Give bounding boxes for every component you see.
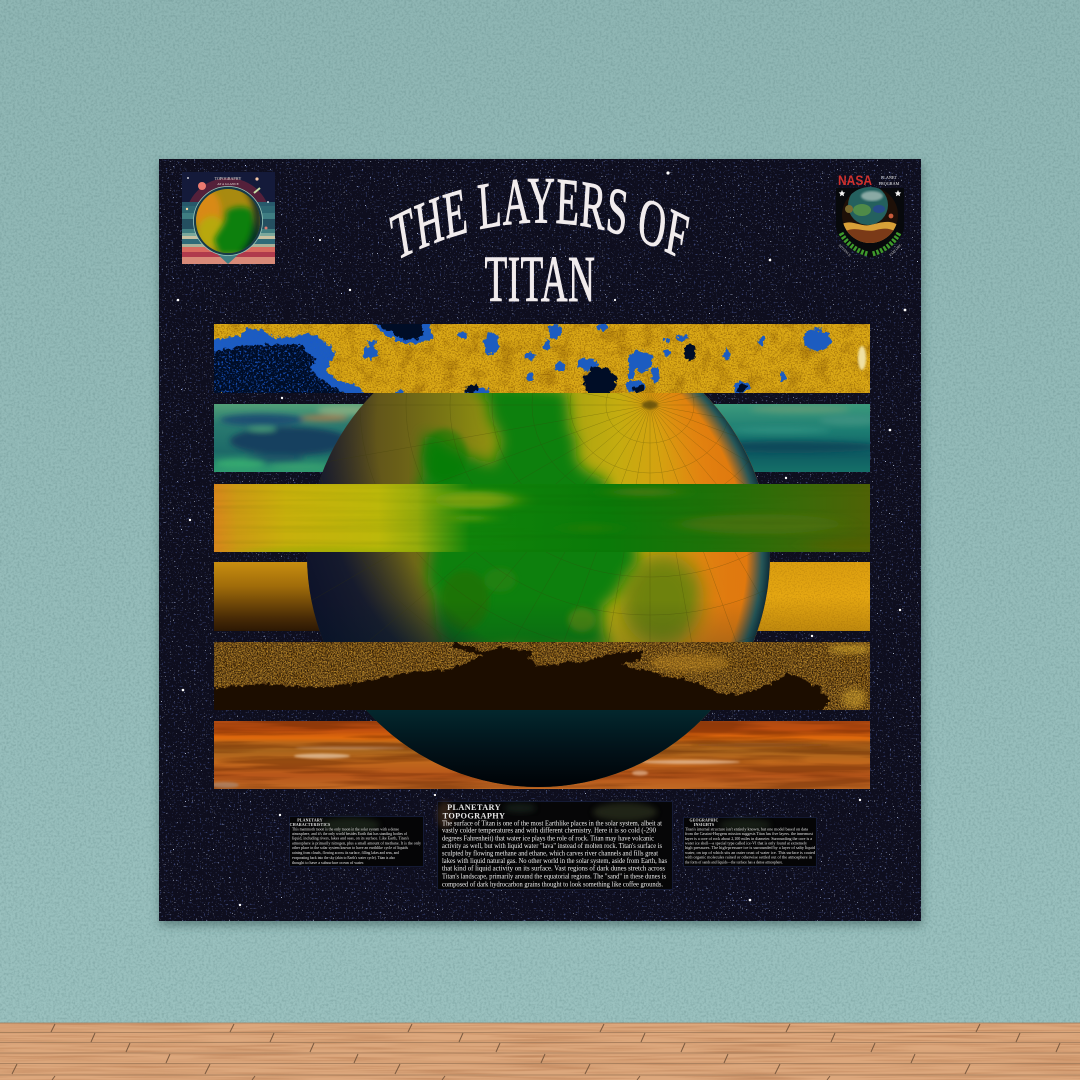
body copy: planetary topography: sculpted by flowing methane and ethane, which carves river channels and fills great — [442, 848, 659, 857]
title: TITAN — [485, 242, 595, 316]
body copy: planetary characteristics: This mammoth moon is the only moon in the solar system with a dense — [292, 826, 399, 832]
poster: starfield background — [159, 159, 921, 921]
heading: geographic insights: INSIGHTS — [694, 823, 714, 827]
planet Titan sphere — [307, 393, 770, 787]
title: THE LAYERS OF — [389, 178, 690, 258]
thumbnail badge: retro Titan poster: AT A GLANCE — [217, 182, 239, 186]
body copy: geographic insights — [685, 826, 815, 864]
band 5: radar shoreline layer — [212, 642, 872, 712]
body copy: planetary topography: that kind of liquid activity on its surface. Vast regions of dark dunes stretch across — [442, 864, 665, 873]
band 6: orange surface layer — [211, 721, 870, 789]
body copy: geographic insights: with organic molecules rained or otherwise settled out of the atmosphere in — [685, 854, 812, 860]
body copy: planetary topography: The surface of Titan is one of the most Earthlike places in the solar system, albeit at — [442, 818, 663, 827]
wooden floor — [0, 1023, 1080, 1080]
heading: planetary topography — [443, 803, 505, 820]
thumbnail badge: retro Titan poster — [182, 172, 275, 264]
body copy: planetary topography: composed of dark hydrocarbon grains thought to look something like coffee grounds. — [442, 880, 663, 889]
body copy: planetary characteristics: evaporating back into the sky (akin to Earth's water cycle). Titan is also — [292, 855, 395, 860]
band 2: atmosphere teal layer — [214, 404, 880, 472]
text panel: geographic insights — [684, 818, 816, 866]
text panel: planetary topography — [437, 801, 672, 890]
body copy: geographic insights: water ice shell—a special type called ice-VI that is only found at extremely — [685, 840, 808, 846]
body copy: geographic insights: water, on top of which sits an outer crust of water ice. This surface is coated — [685, 850, 815, 856]
body copy: planetary characteristics: thought to have a subsurface ocean of water. — [292, 860, 364, 865]
body copy: planetary topography — [442, 818, 667, 889]
thumbnail badge: retro Titan poster: TOPOGRAPHY — [215, 176, 242, 181]
NASA logo and program label: NASA — [838, 172, 872, 188]
body copy: planetary topography: activity as well, but with liquid water "lava" instead of molten rock. Titan's surface is — [442, 841, 662, 850]
body copy: planetary characteristics: atmosphere, and it's the only world besides Earth that has standing bodies of — [292, 831, 408, 837]
dark shoreline lake — [212, 642, 830, 712]
laurel wreath — [841, 233, 899, 254]
body copy: planetary characteristics: raining from clouds, flowing across its surface, filling lakes and seas, and — [292, 850, 399, 856]
heading: planetary characteristics: CHARACTERISTICS — [290, 823, 330, 827]
body copy: geographic insights: high pressures. The high-pressure ice is surrounded by a layer of salty liquid — [685, 845, 815, 850]
NASA logo and program label: PROGRAM — [879, 181, 900, 186]
NASA logo and program label: PLANET — [881, 175, 897, 180]
band 1: radar lake map layer — [212, 322, 870, 397]
green lowlands on the sphere — [420, 385, 640, 650]
NASA logo and program label — [838, 172, 900, 188]
blue lakes — [212, 322, 831, 396]
body copy: planetary topography: Titan's landscape, primarily around the equatorial regions. The "sand" in these dunes is — [442, 872, 666, 881]
band 3: methane green layer — [214, 484, 890, 557]
body copy: planetary topography: degrees Fahrenheit) that water ice plays the role of rock. Titan may have volcanic — [442, 833, 655, 842]
title — [389, 178, 690, 316]
bright highlands — [650, 644, 872, 708]
poster shadow — [160, 163, 922, 925]
body copy: planetary characteristics: liquid, including rivers, lakes and seas, on its surface. Like Earth, Titan's — [292, 836, 409, 842]
heading: planetary characteristics — [290, 818, 330, 827]
mission shield badge — [836, 185, 904, 258]
mission shield badge: ADVANCE — [838, 243, 852, 257]
mission shield badge: EXPLORE — [888, 243, 902, 257]
body copy: geographic insights: Titan's internal structure isn't entirely known, but one model based on data — [685, 826, 808, 832]
blue speckle over the dark lake — [214, 333, 362, 393]
heading: geographic insights — [689, 818, 719, 827]
heading: geographic insights: GEOGRAPHIC — [689, 818, 719, 822]
body copy: planetary characteristics: atmosphere is primarily nitrogen, plus a small amount of methane. It is the only — [292, 840, 422, 846]
heading: planetary characteristics: PLANETARY — [297, 818, 323, 822]
heading: planetary topography: TOPOGRAPHY — [443, 812, 505, 820]
dark lake interiors — [212, 322, 746, 397]
body copy: planetary topography: lakes with liquid natural gas. No other world in the solar system, aside from Earth, has — [442, 856, 667, 865]
band 4: golden layer — [214, 562, 870, 631]
body copy: planetary characteristics: other place in the solar system known to have an earthlike cycle of liquids — [292, 845, 408, 850]
text panel: planetary characteristics — [290, 816, 424, 866]
body copy: planetary topography: vastly colder temperatures and with different chemistry. Here it is so cold (-290 — [442, 826, 656, 835]
body copy: geographic insights: layer is a core of rock about 2,100 miles in diameter. Surrounding the core is a — [685, 836, 812, 842]
body copy: geographic insights: from the Cassini-Huygens mission suggests Titan has five layers. the innermost — [685, 831, 814, 836]
body copy: planetary characteristics — [292, 826, 422, 865]
body copy: geographic insights: the form of sands and liquids—the surface has a dense atmosphere. — [685, 859, 783, 864]
sphere latitude and longitude grid — [312, 393, 768, 642]
heading: planetary topography: PLANETARY — [447, 803, 501, 812]
